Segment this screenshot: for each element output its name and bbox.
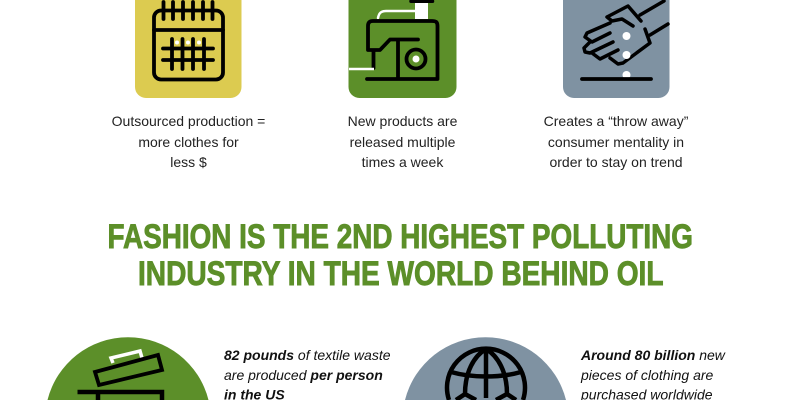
panel: throw away mentality [544, 0, 689, 170]
stat: textile waste [48, 337, 391, 400]
icon tile: green [348, 0, 456, 98]
icon: hand dropping items [584, 1, 668, 64]
stat text: of textile waste [294, 347, 391, 363]
stat: clothing purchased [405, 337, 726, 400]
icon: calendar white dots [175, 40, 201, 44]
caption: released multiple [350, 134, 456, 150]
icon: bin with lid [78, 351, 162, 400]
icon tile: gray [563, 0, 670, 98]
icon: falling dots [622, 32, 630, 79]
icon: globe [447, 349, 525, 400]
caption: Creates a “throw away” [544, 113, 689, 129]
caption: more clothes for [138, 134, 239, 150]
icon tile: yellow [135, 0, 242, 98]
icon: sewing machine [349, 1, 438, 79]
stat text: Around 80 billion [580, 347, 695, 363]
stat text: pieces of clothing are [580, 367, 714, 383]
heading line 2: INDUSTRY IN THE WORLD BEHIND OIL [138, 255, 664, 293]
caption: consumer mentality in [548, 134, 684, 150]
caption: New products are [348, 113, 458, 129]
heading [108, 218, 693, 293]
caption: times a week [362, 154, 444, 170]
stat text: are produced [224, 367, 310, 383]
stat text: 82 pounds [224, 347, 294, 363]
ground line [582, 77, 651, 81]
caption: Outsourced production = [112, 113, 265, 129]
caption: less $ [170, 154, 207, 170]
panel: new products [348, 0, 458, 170]
circle: green [48, 337, 208, 400]
caption: order to stay on trend [549, 154, 683, 170]
stat text: per person [309, 367, 383, 383]
circle: gray [405, 337, 566, 400]
stat text: new [695, 347, 726, 363]
panel: outsourced production [112, 0, 265, 170]
icon: calendar [154, 2, 223, 80]
